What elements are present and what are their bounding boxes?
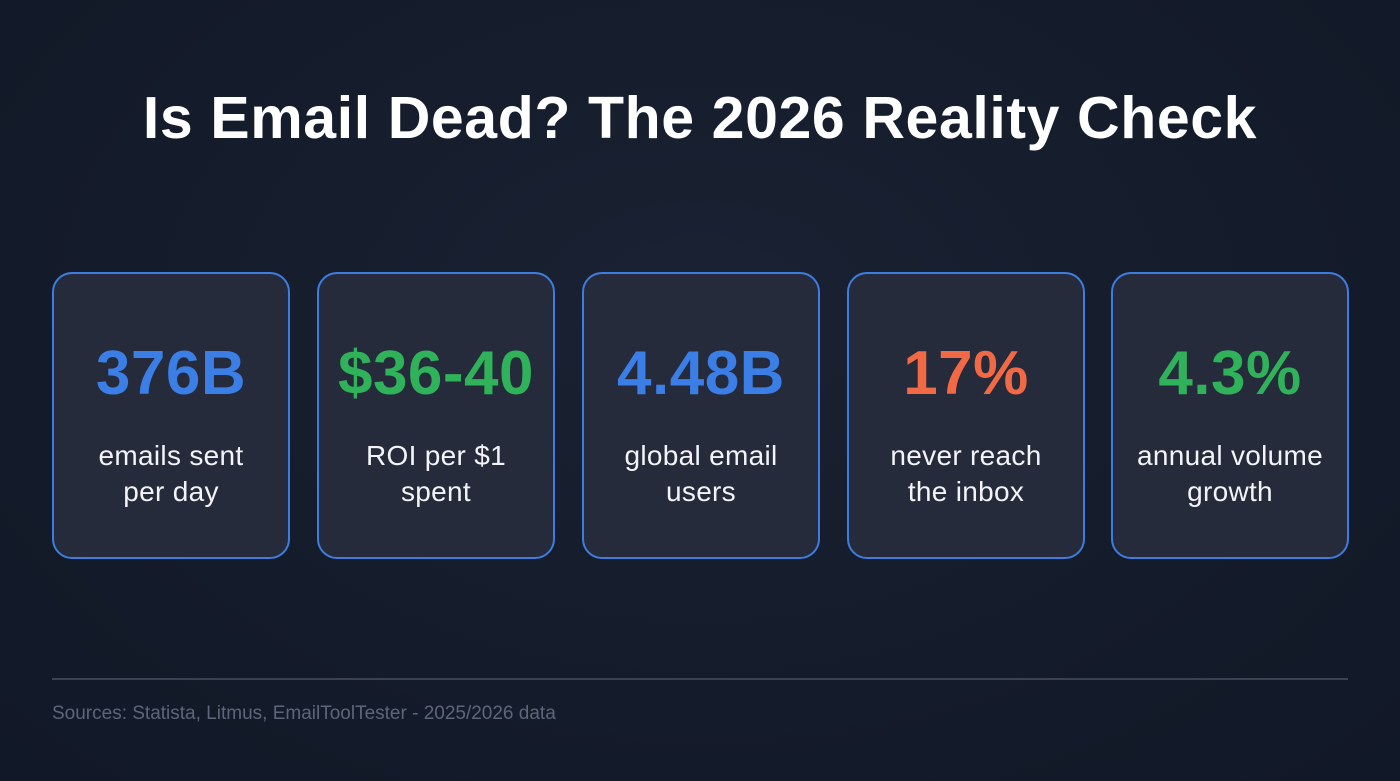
card: users: users — [666, 476, 736, 507]
card: growth: growth — [1187, 476, 1273, 507]
card: growth: 4.3% — [1158, 339, 1302, 408]
card: emails per day: per day — [123, 476, 219, 507]
card: ROI: spent — [401, 476, 471, 507]
card: growth — [1111, 272, 1349, 559]
card: ROI — [317, 272, 555, 559]
card: inbox: the inbox — [908, 476, 1024, 507]
card: emails per day: emails sent — [99, 440, 243, 471]
card: ROI: $36-40 — [338, 339, 534, 408]
card: emails per day: 376B — [96, 339, 246, 408]
sources: Sources: Statista, Litmus, EmailToolTester - 2025/2026 data — [52, 703, 556, 724]
card: users: 4.48B — [617, 339, 785, 408]
title: Is Email Dead? The 2026 Reality Check — [143, 85, 1257, 151]
card: users: global email — [624, 440, 778, 471]
card: ROI: ROI per $1 — [366, 440, 506, 471]
card: inbox: 17% — [903, 339, 1029, 408]
card: inbox: never reach — [890, 440, 1042, 471]
card: emails per day — [52, 272, 290, 559]
card: users — [582, 272, 820, 559]
card: growth: annual volume — [1137, 440, 1323, 471]
card: inbox — [847, 272, 1085, 559]
